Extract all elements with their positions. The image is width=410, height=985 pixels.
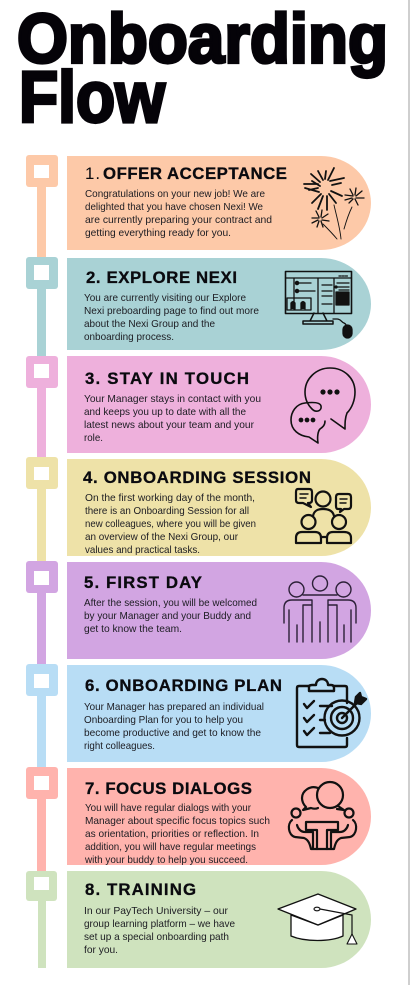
text: step 3 body: and keeps you up to date with all the: [84, 407, 246, 418]
text: step 7 body: Manager about specific focus topics such: [85, 816, 270, 827]
text: step 6 body: [84, 702, 264, 752]
timeline marker 6: [26, 664, 58, 775]
icon: fireworks: [304, 168, 364, 239]
text: step 8 body: In our PayTech University – our: [84, 906, 229, 917]
text: step 6 body: Onboarding Plan for you to help you: [84, 715, 243, 726]
text: step 3 body: [84, 394, 261, 444]
text: step 4 body: there is an Onboarding Session for all: [85, 506, 249, 517]
text: step 2 body: Nexi preboarding page to find out more: [84, 306, 259, 317]
panel: step 7 focus dialogs: [26, 768, 371, 968]
text: step 7 body: addition, you will have regular meetings: [85, 842, 256, 853]
icon: clipboard with target: [297, 679, 366, 747]
text: step 2 body: onboarding process.: [84, 332, 174, 343]
timeline marker 1: [26, 155, 58, 260]
text: step 6 body: become productive and get to know the: [84, 728, 261, 739]
text: step 8 body: group learning platform – we have: [84, 919, 235, 930]
heading: step 3: 3. STAY IN TOUCH: [85, 369, 249, 388]
icon: computer with mouse: [286, 272, 352, 338]
text: step 1 body: Congratulations on your new job! We are: [85, 189, 265, 200]
heading: step 1: 1.: [85, 164, 100, 183]
heading: step 4: 4. ONBOARDING SESSION: [83, 468, 311, 487]
title: [17, 0, 388, 138]
panel: step 8 training: [67, 871, 371, 968]
text: step 7 body: You will have regular dialogs with your: [85, 803, 252, 814]
icon: speech bubbles: [291, 368, 355, 443]
text: step 1 body: are currently preparing your contract and: [85, 215, 272, 226]
panel: step 2 explore nexi: [26, 258, 371, 968]
text: step 6 body: right colleagues.: [84, 741, 155, 752]
text: step 1 body: delighted that you have chosen Nexi! We: [85, 202, 263, 213]
title: Onboarding: [17, 0, 388, 78]
text: step 4 body: an overview of the Nexi Group, our: [85, 532, 239, 543]
panel: step 3 stay in touch: [26, 356, 371, 968]
heading: step 6: 6. ONBOARDING PLAN: [85, 676, 282, 695]
text: step 7 body: with your buddy to help you succeed.: [84, 855, 248, 866]
heading: step 2: 2. EXPLORE NEXI: [86, 268, 237, 287]
text: step 5 body: [84, 598, 257, 635]
icon: people talking at table: [289, 782, 356, 849]
text: step 1 body: [85, 189, 272, 239]
text: step 3 body: Your Manager stays in contact with you: [84, 394, 261, 405]
title: Flow: [19, 58, 166, 138]
icon: meeting group: [296, 489, 351, 543]
text: step 4 body: values and practical tasks.: [85, 545, 200, 556]
heading: step 1: OFFER ACCEPTANCE: [103, 164, 287, 183]
panel: step 6 onboarding plan: [26, 665, 371, 968]
timeline marker 8: [26, 871, 57, 968]
timeline marker 2: [26, 257, 58, 360]
heading: step 7: 7. FOCUS DIALOGS: [85, 779, 252, 798]
panel: step 5 first day: [26, 562, 371, 968]
text: step 5 body: by your Manager and your Buddy and: [84, 611, 251, 622]
timeline marker 5: [26, 561, 58, 670]
icon: three colleagues: [284, 576, 356, 642]
text: step 2 body: You are currently visiting our Explore: [84, 293, 246, 304]
text: step 8 body: set up a special onboarding path: [84, 932, 229, 943]
panel: step 1 offer acceptance: [26, 156, 371, 968]
heading: step 5: 5. FIRST DAY: [84, 573, 202, 592]
text: step 5 body: get to know the team.: [84, 624, 182, 635]
text: step 2 body: [84, 293, 259, 343]
text: step 1 body: getting everything ready for you.: [85, 228, 231, 239]
text: step 4 body: On the first working day of the month,: [85, 493, 255, 504]
heading: step 8: 8. TRAINING: [85, 880, 196, 899]
icon: graduation cap: [278, 894, 357, 944]
timeline marker 3: [26, 356, 58, 460]
text: step 2 body: about the Nexi Group and the: [84, 319, 215, 330]
text: step 6 body: Your Manager has prepared an individual: [84, 702, 264, 713]
text: step 4 body: new colleagues, where you will be given: [85, 519, 256, 530]
timeline marker 7: [26, 767, 58, 880]
text: step 4 body: [85, 493, 256, 556]
timeline marker 4: [26, 457, 58, 565]
text: step 7 body: as orientation, priorities or reflection. In: [85, 829, 259, 840]
text: step 8 body: [84, 906, 235, 956]
panel: step 4 onboarding session: [26, 459, 371, 968]
text: step 5 body: After the session, you will be welcomed: [84, 598, 257, 609]
text: step 8 body: for you.: [84, 945, 118, 956]
text: step 7 body: [84, 803, 270, 866]
text: step 3 body: role.: [84, 433, 103, 444]
text: step 3 body: latest news about your team and your: [84, 420, 255, 431]
